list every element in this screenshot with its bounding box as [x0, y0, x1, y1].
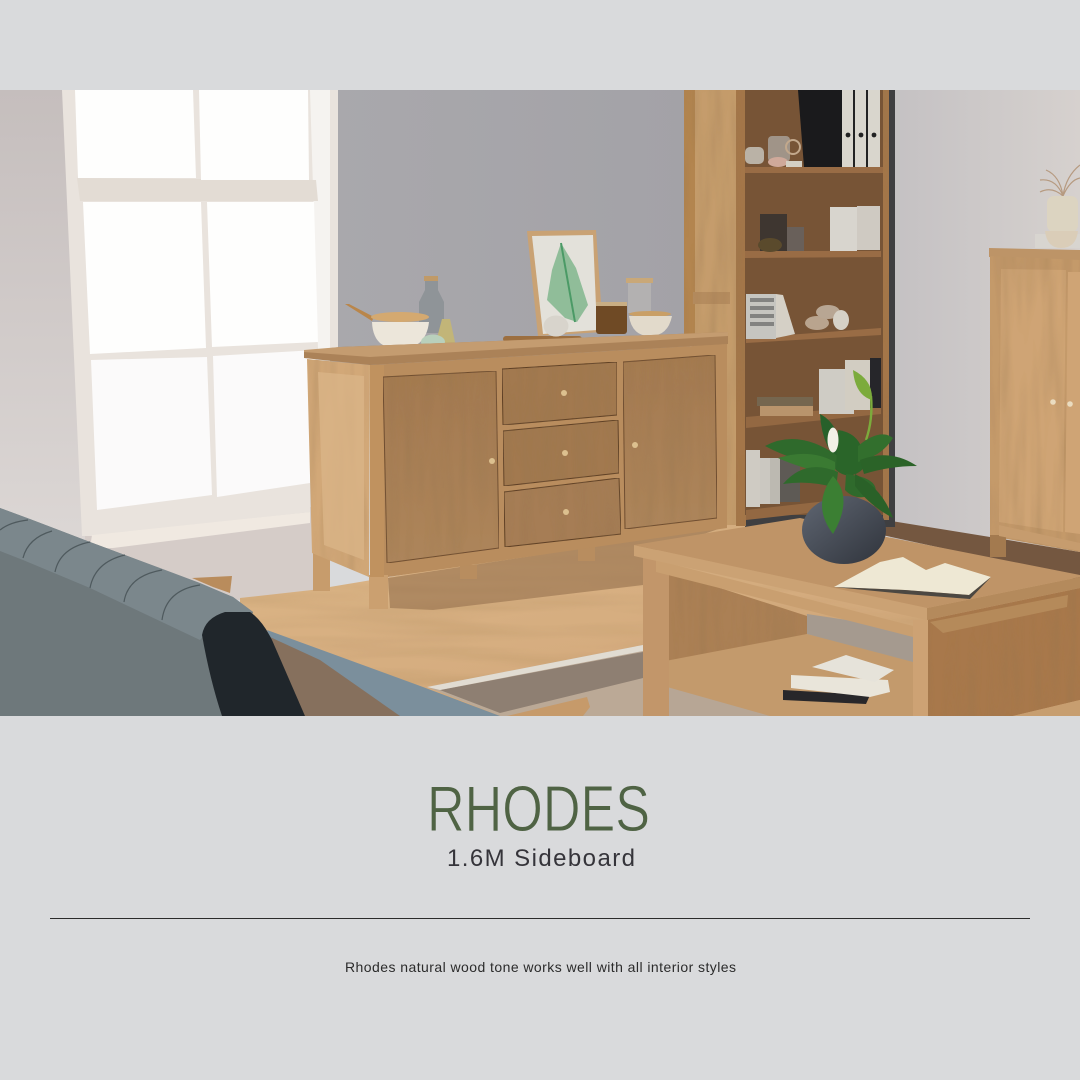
wood corner at bottom right	[1013, 700, 1080, 716]
divider	[50, 918, 1030, 919]
binders	[798, 90, 880, 167]
right edge	[927, 577, 1080, 620]
left door	[383, 371, 499, 563]
window panes	[75, 90, 196, 178]
table top	[634, 518, 1080, 608]
window sill	[90, 512, 310, 548]
shelves	[745, 167, 883, 173]
dried plant stems	[1040, 165, 1080, 196]
title: RHODES	[427, 772, 650, 845]
knobs	[489, 390, 638, 515]
window middle rail	[77, 178, 318, 201]
leaves	[765, 414, 917, 534]
dark floor on the right	[885, 522, 1080, 578]
bookcase side	[684, 90, 889, 526]
wooden tray	[503, 336, 582, 341]
lower shelf	[660, 634, 913, 716]
shelf five books	[746, 450, 800, 507]
top apron	[656, 560, 913, 637]
left wall	[0, 90, 82, 530]
glass jar	[626, 278, 653, 313]
right door	[623, 355, 717, 529]
shelf four books	[757, 358, 881, 416]
cabinet frame	[990, 256, 1080, 552]
sofa seat cushion	[267, 630, 500, 716]
window frame	[62, 90, 338, 536]
wooden arm front	[507, 697, 590, 716]
open book	[834, 557, 991, 599]
brown pillow	[270, 637, 400, 716]
sofa body	[0, 508, 253, 716]
sideboard decor	[345, 230, 672, 350]
right apron	[930, 595, 1068, 633]
books on lower shelf	[783, 655, 894, 704]
right face	[927, 588, 1080, 716]
books on cabinet	[1035, 234, 1080, 248]
vase	[1047, 196, 1078, 232]
photo: living room with Rhodes furniture	[0, 90, 1080, 716]
lower wall under window	[85, 505, 330, 600]
bookcase dark gap	[745, 515, 895, 527]
cabinet door right	[1065, 272, 1080, 534]
cabinet knobs	[1050, 399, 1056, 405]
rug visible behind table	[807, 614, 913, 665]
front edge	[634, 545, 927, 620]
sideboard	[304, 332, 728, 609]
right cabinet	[989, 165, 1080, 557]
grey back wall	[330, 90, 690, 370]
rug	[427, 645, 643, 716]
rug under table	[660, 684, 780, 716]
ceramic bowl with spoon	[345, 304, 429, 349]
left leg	[313, 550, 330, 591]
framed fern print	[527, 230, 603, 336]
cabinet leg	[990, 535, 1006, 557]
bud stem and leaf	[853, 370, 872, 440]
plant in grey pot	[765, 370, 917, 564]
second bowl	[629, 311, 672, 336]
white flower	[828, 428, 838, 452]
fern leaf	[547, 243, 588, 322]
shadow under sideboard	[388, 526, 727, 610]
wooden floor	[240, 520, 1080, 716]
window	[62, 90, 338, 548]
cabinet top	[989, 248, 1080, 262]
small white pot	[544, 316, 568, 336]
cabinet bottom rail	[999, 525, 1080, 551]
subtitle: 1.6M Sideboard	[447, 845, 635, 872]
coffee table	[634, 518, 1080, 716]
dark sofa back side	[202, 612, 305, 716]
top surface	[304, 332, 728, 365]
amber jar	[596, 302, 627, 334]
bookcase back	[745, 90, 883, 515]
cabinet door left	[999, 269, 1066, 532]
wooden armrest	[192, 576, 232, 593]
drawer three	[504, 478, 621, 547]
outer white strip	[310, 90, 330, 350]
sofa tufted band	[0, 508, 253, 640]
mug and bowl	[745, 136, 802, 167]
bowl on cabinet	[1045, 231, 1078, 248]
drawer two	[503, 420, 619, 486]
drawer one	[502, 362, 617, 425]
front leg	[369, 575, 388, 609]
glass bottle	[419, 276, 444, 333]
bookcase	[684, 90, 895, 527]
caption: Rhodes natural wood tone works well with all interior styles	[345, 959, 736, 975]
back panel	[664, 570, 807, 668]
sofa	[0, 508, 590, 716]
back legs	[460, 565, 477, 579]
small vases	[421, 319, 455, 344]
front body	[370, 344, 727, 577]
left leg	[643, 556, 669, 716]
front leg	[913, 620, 928, 716]
shelf two objects	[758, 206, 880, 252]
right wall	[890, 90, 1080, 560]
side panel	[307, 359, 370, 577]
shelf three books and bowls	[746, 294, 849, 339]
sofa tuft lines	[0, 520, 200, 620]
pot	[802, 496, 886, 564]
